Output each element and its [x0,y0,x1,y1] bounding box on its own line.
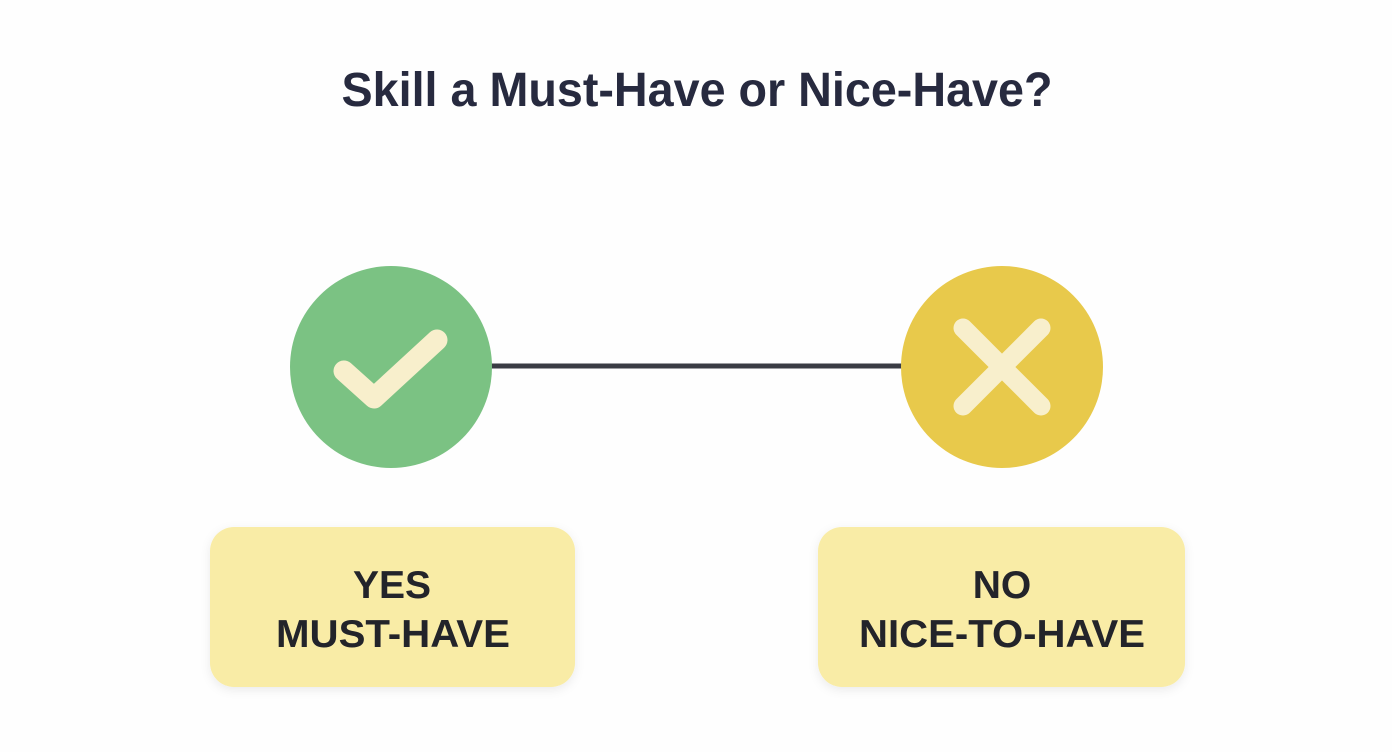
box: no nice-to-have [818,527,1185,687]
connector line [490,364,903,368]
box: no nice-to-have: NO [973,564,1031,607]
title: Skill a Must-Have or Nice-Have? [342,64,1052,117]
icon: yellow x circle [901,266,1103,468]
icon: green check circle [290,266,492,468]
box: yes must-have: MUST-HAVE [276,613,510,656]
box: no nice-to-have: NICE-TO-HAVE [859,613,1145,656]
box: yes must-have [210,527,575,687]
box: yes must-have: YES [353,564,431,607]
